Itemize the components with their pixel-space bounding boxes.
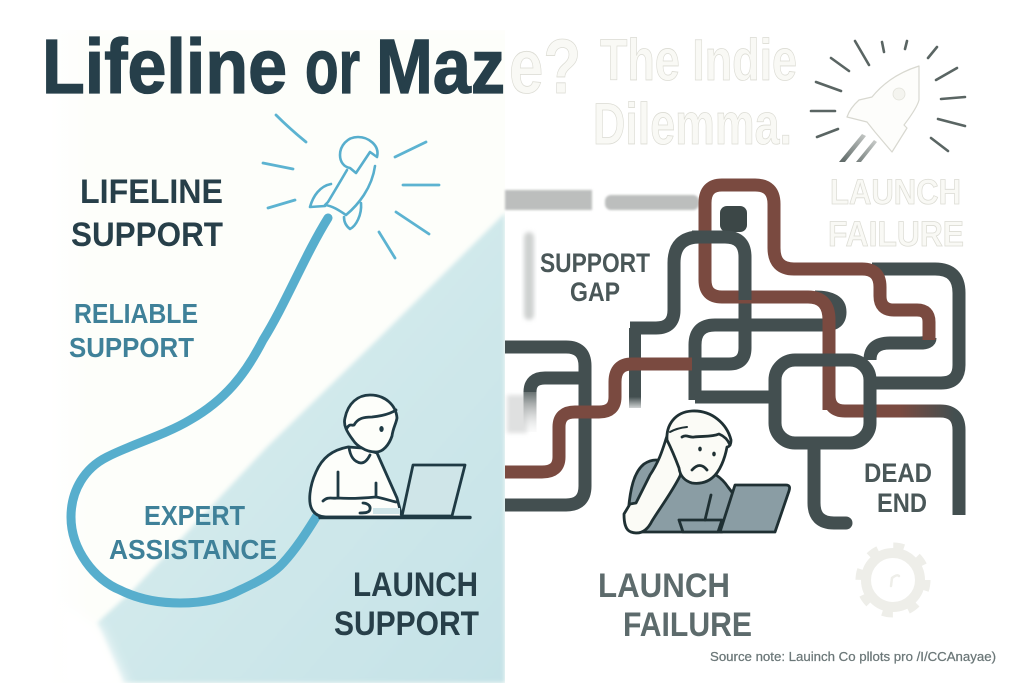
label: launch support: LAUNCH [353,566,478,604]
label: support gap: GAP [570,277,620,307]
source note: Source note: Lauinch Co pllots pro /I/CCAnayae) [710,649,996,664]
red to dark transition [900,411,959,430]
icon: blue launch rays [263,115,439,258]
label: launch support: SUPPORT [334,605,479,643]
arrow: lifeline trail [71,218,328,603]
title: main heading: Lifeline [42,24,287,110]
label: pale launch failure: LAUNCH [830,173,961,212]
label: expert assistance: EXPERT [144,500,245,531]
label: lifeline support: LIFELINE [80,173,223,211]
label: support gap: SUPPORT [540,248,650,278]
label: launch failure [598,567,752,644]
label: lifeline support: SUPPORT [71,216,223,254]
label: reliable support: RELIABLE [74,298,198,329]
label: support gap [540,248,650,307]
label: expert assistance: ASSISTANCE [109,534,277,565]
title: main heading [42,24,581,110]
label: dead end [864,458,932,518]
label: dead end: DEAD [864,458,932,488]
dark dead-end block [720,206,747,232]
label: reliable support: SUPPORT [69,332,194,363]
label: dead end: END [877,488,927,518]
label: pale launch failure [828,173,964,254]
label: lifeline support [71,173,223,254]
label: launch support [334,566,479,643]
subtitle: The Indie Dilemma: Dilemma. [593,92,792,157]
subtitle: The Indie Dilemma [593,28,797,157]
title: main heading: e? [509,24,581,110]
icon: stressed founder at laptop [624,411,790,533]
dark maze lines, upper layer [692,237,870,443]
diagram: maze paths [505,185,959,523]
title: main heading: or [305,24,360,110]
icon: blue rocket [310,137,377,229]
faded maze edges [505,190,699,433]
dark maze lines, lower layer [505,237,959,523]
icon: confident founder at laptop [310,395,470,518]
icon: pale rocket with rays [811,41,965,162]
label: pale launch failure: FAILURE [828,215,964,254]
subtitle: The Indie Dilemma: The Indie [600,28,797,93]
title: main heading: Maz [376,24,505,110]
red maze lines [505,185,929,472]
label: launch failure: LAUNCH [598,567,730,605]
icon: pale gear [858,546,928,614]
label: expert assistance [109,500,277,565]
label: reliable support [69,298,198,363]
label: launch failure: FAILURE [623,606,752,644]
